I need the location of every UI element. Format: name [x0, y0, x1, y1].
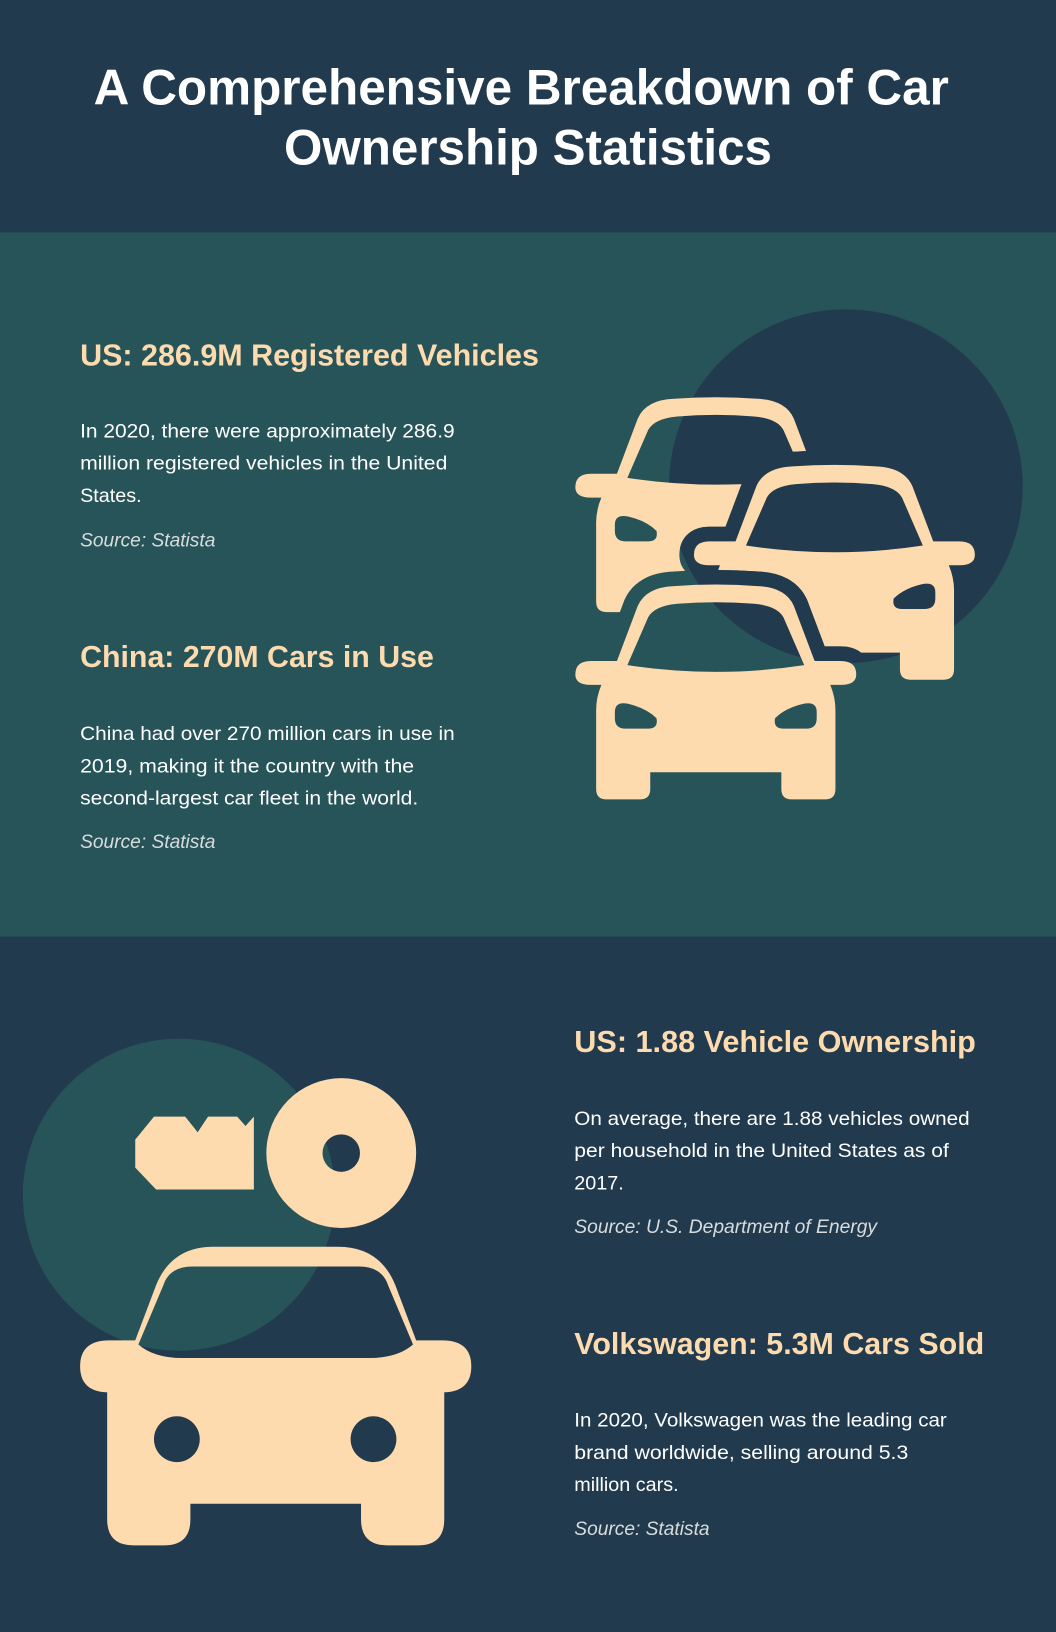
stat: Volkswagen cars sold: million cars. [574, 1474, 679, 1496]
stat: Volkswagen cars sold: brand worldwide, selling around 5.3 [574, 1442, 908, 1464]
stat: Volkswagen cars sold [574, 1328, 984, 1540]
stat: China cars in use: China: 270M Cars in Use [80, 641, 434, 674]
title: A Comprehensive Breakdown of Car [94, 59, 949, 115]
title [94, 59, 949, 176]
stat: Volkswagen cars sold: Source: Statista [574, 1518, 710, 1540]
stat: Volkswagen cars sold: Volkswagen: 5.3M Cars Sold [574, 1328, 984, 1361]
stat: US registered vehicles: States. [80, 485, 142, 507]
panel: registered vehicles section [0, 232, 1056, 937]
stat: US registered vehicles: In 2020, there were approximately 286.9 [80, 420, 455, 442]
stat: US vehicle ownership: On average, there are 1.88 vehicles owned [574, 1108, 970, 1130]
stat: US vehicle ownership: per household in the United States as of [574, 1140, 949, 1162]
stat: US vehicle ownership: US: 1.88 Vehicle Ownership [574, 1026, 976, 1059]
stat: China cars in use [80, 641, 455, 853]
stat: China cars in use: Source: Statista [80, 831, 215, 853]
stat: US registered vehicles: Source: Statista [80, 530, 215, 552]
stat: US vehicle ownership: Source: U.S. Department of Energy [574, 1216, 878, 1238]
stat: China cars in use: 2019, making it the country with the [80, 755, 414, 777]
stat: US vehicle ownership [574, 1026, 976, 1238]
stat: China cars in use: China had over 270 million cars in use in [80, 723, 455, 745]
icon: three cars with circle [575, 309, 1023, 799]
stat: China cars in use: second-largest car fleet in the world. [80, 788, 418, 810]
stat: US registered vehicles: million registered vehicles in the United [80, 453, 447, 475]
stat: Volkswagen cars sold: In 2020, Volkswagen was the leading car [574, 1410, 947, 1432]
stat: US registered vehicles [80, 340, 539, 552]
icon: car and key [23, 1039, 471, 1545]
stat: US vehicle ownership: 2017. [574, 1173, 624, 1195]
panel: ownership section [0, 937, 1056, 1632]
header band [0, 0, 1056, 232]
stat: US registered vehicles: US: 286.9M Registered Vehicles [80, 340, 539, 373]
title: Ownership Statistics [284, 120, 772, 176]
